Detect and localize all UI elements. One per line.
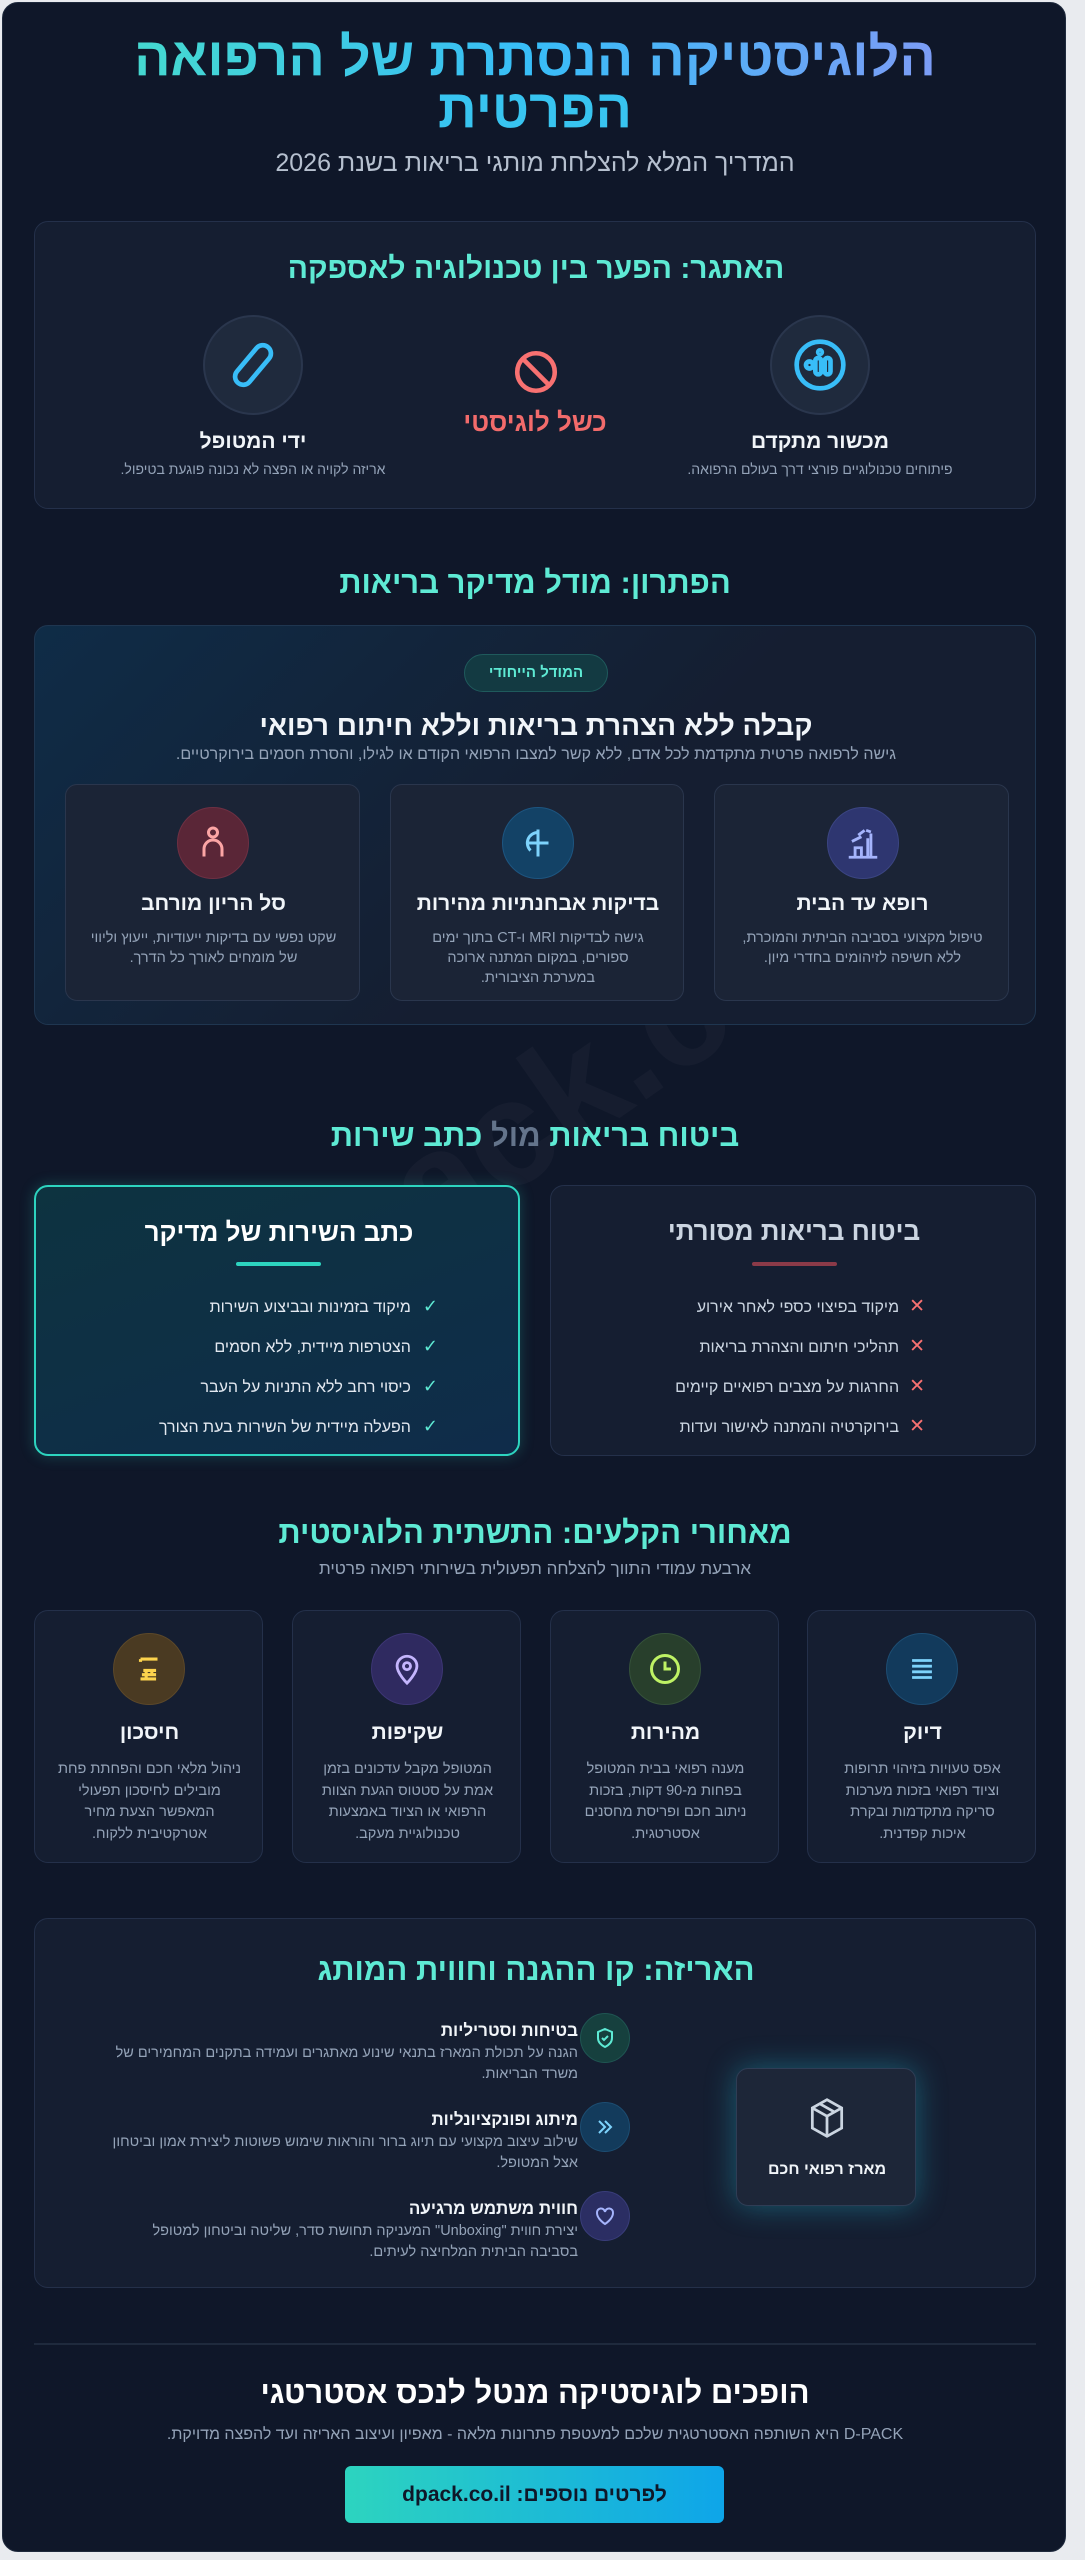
- icon: location pin: [371, 1633, 443, 1705]
- item: patient's hands: [121, 315, 386, 477]
- list: cons: ✕מיקוד בפיצוי כספי לאחר אירוע: [697, 1296, 925, 1317]
- footer text: D-PACK היא השותפה האסטרטגית שלכם למעטפת פתרונות מלאה - מאפיון ועיצוב האריזה ועד להפצה מדויקת.: [167, 2426, 903, 2443]
- card: savings: [34, 1610, 263, 1863]
- panel: packaging: [34, 1918, 1036, 2288]
- panel: challenge: [34, 221, 1036, 509]
- icon: pill: [203, 315, 303, 415]
- card: transparency: המטופל מקבל עדכונים בזמן אמת על סטטוס הגעת הצוות הרפואי או הציוד באמצעות טכנולוגיית מעקב.: [322, 1761, 493, 1842]
- title: הפרטית: [438, 79, 632, 139]
- text: description: גישה לרפואה פרטית מתקדמת לכל אדם, ללא קשר למצבו הרפואי הקודם או לגילו, והסרת חסמים בירוקרטיים.: [176, 746, 896, 763]
- list: cons: [675, 1296, 925, 1437]
- panel: traditional insurance: [550, 1185, 1036, 1456]
- panel: service policy: כתב השירות של מדיקר: [145, 1217, 413, 1247]
- button: contact: [345, 2466, 724, 2523]
- heading: no health declaration: קבלה ללא הצהרת בריאות וללא חיתום רפואי: [259, 710, 813, 741]
- card: accuracy: דיוק: [903, 1721, 942, 1744]
- heading: insurance vs policy: ביטוח בריאות מול כתב שירות: [331, 1118, 739, 1153]
- heading: behind the scenes: מאחורי הקלעים: התשתית הלוגיסטית: [278, 1515, 792, 1550]
- title: הלוגיסטיקה הנסתרת של הרפואה: [134, 27, 936, 87]
- card: extended pregnancy basket: סל הריון מורחב: [141, 892, 286, 915]
- card: transparency: [292, 1610, 521, 1863]
- item: patient's hands: אריזה לקויה או הפצה לא נכונה פוגעת בטיפול.: [121, 461, 385, 477]
- list: pros: ✓מיקוד בזמינות ובביצוע השירות: [210, 1296, 438, 1316]
- card: doctor at home: רופא עד הבית: [797, 892, 928, 915]
- icon: clock: [629, 1633, 701, 1705]
- list: pros: ✓כיסוי רחב ללא התניות על העבר: [200, 1376, 438, 1396]
- panel: solution model: [34, 625, 1036, 1025]
- card: savings: חיסכון: [120, 1721, 179, 1744]
- item: branding: שילוב עיצוב מקצועי עם תיוג ברור והוראות שימוש פשוטות ליצירת אמון וביטחון אצל המטופל.: [113, 2134, 578, 2171]
- item: branding: מיתוג ופונקציונליות: [431, 2110, 578, 2129]
- card: accuracy: [807, 1610, 1036, 1863]
- badge: המודל הייחודי: [489, 664, 583, 681]
- item: user experience: [152, 2191, 630, 2260]
- list: pros: ✓הצטרפות מיידית, ללא חסמים: [214, 1336, 438, 1356]
- subtitle: המדריך המלא להצלחת מותגי בריאות בשנת 2026: [275, 149, 795, 177]
- item: advanced equipment: מכשור מתקדם: [751, 430, 889, 453]
- watermark: dpack.co.il: [205, 798, 936, 1380]
- icon: scan: [502, 807, 574, 879]
- list: pros: ✓הפעלה מיידית של השירות בעת הצורך: [159, 1416, 438, 1436]
- card: fast diagnostics: [390, 784, 684, 1001]
- item: logistic failure: [463, 351, 607, 437]
- icon: box: [810, 2098, 844, 2138]
- card: speed: מהירות: [631, 1721, 700, 1744]
- item: safety: בטיחות וסטריליות: [441, 2021, 578, 2040]
- box: smart medical kit: מארז רפואי חכם: [768, 2161, 886, 2178]
- card: doctor at home: [714, 784, 1009, 1001]
- icon: savings: [113, 1633, 185, 1705]
- icon: shield: [580, 2013, 630, 2063]
- list: cons: ✕בירוקרטיה והמתנה לאישור ועדות: [680, 1416, 925, 1437]
- card: extended pregnancy basket: [65, 784, 360, 1001]
- title: [134, 27, 936, 139]
- item: user experience: חווית משתמש מרגיעה: [409, 2199, 578, 2218]
- icon: heart: [580, 2191, 630, 2241]
- heading: solution: הפתרון: מודל מדיקר בריאות: [339, 565, 731, 600]
- list: cons: ✕תהליכי חיתום והצהרת בריאות: [699, 1336, 925, 1357]
- card: transparency: שקיפות: [372, 1721, 443, 1744]
- card: extended pregnancy basket: שקט נפשי עם בדיקות ייעודיות, ייעוץ וליווי של מומחים לאורך כל הדרך.: [91, 930, 336, 966]
- card: speed: מענה רפואי בבית המטופל בפחות מ-90 דקות, בזכות ניתוב חכם ופריסת מחסנים אסטרטגית.: [585, 1761, 746, 1842]
- heading: packaging: האריזה: קו ההגנה וחווית המותג: [317, 1952, 755, 1987]
- list: pros: [159, 1296, 438, 1436]
- card: fast diagnostics: בדיקות אבחנתיות מהירות: [417, 892, 659, 915]
- card: accuracy: אפס טעויות בזיהוי תרופות וציוד רפואי בזכות מערכות סריקה מתקדמות ובקרת איכות קפדנית.: [844, 1761, 1001, 1842]
- list: cons: ✕החרגות על מצבים רפואיים קיימים: [675, 1376, 925, 1397]
- icon: forbidden: [514, 351, 558, 393]
- icon: list: [886, 1633, 958, 1705]
- item: user experience: יצירת חווית "Unboxing" המעניקה תחושת סדר, שליטה וביטחון למטופל בסביבה הביתית המלחיצה לעיתים.: [152, 2223, 578, 2260]
- item: advanced equipment: [687, 315, 953, 477]
- item: logistic failure: כשל לוגיסטי: [463, 407, 607, 437]
- card: savings: ניהול מלאי חכם והפחתת פחת מובילים לחיסכון תפעולי המאפשר הצעת מחיר אטרקטיבית ללקוח.: [58, 1761, 241, 1842]
- panel: traditional insurance: ביטוח בריאות מסורתי: [668, 1216, 920, 1246]
- card: fast diagnostics: גישה לבדיקות MRI ו-CT בתוך ימים ספורים, במקום המתנה ארוכה במערכת הציבורית.: [432, 930, 644, 986]
- item: advanced equipment: פיתוחים טכנולוגיים פורצי דרך בעולם הרפואה.: [687, 461, 953, 477]
- icon: equipment: [770, 315, 870, 415]
- button: contact: לפרטים נוספים: dpack.co.il: [402, 2483, 667, 2506]
- item: patient's hands: ידי המטופל: [200, 430, 306, 453]
- item: safety: הגנה על תכולת המארז בתנאי שינוע מאתגרים ועמידה בתקנים המחמירים של משרד הבריאות.: [116, 2045, 578, 2082]
- footer heading: הופכים לוגיסטיקה מנטל לנכס אסטרטגי: [260, 2375, 810, 2410]
- item: safety: [116, 2013, 630, 2082]
- icon: person: [177, 807, 249, 879]
- box: smart medical kit: [736, 2068, 916, 2206]
- card: speed: [550, 1610, 779, 1863]
- card: doctor at home: טיפול מקצועי בסביבה הביתית והמוכרת, ללא חשיפה לזיהומים בחדרי מיון.: [742, 930, 983, 966]
- panel: service policy: [34, 1185, 520, 1456]
- item: branding: [113, 2102, 630, 2171]
- badge: [464, 654, 608, 692]
- subtitle: four pillars: ארבעת עמודי התווך להצלחה תפעולית בשירותי רפואה פרטית: [319, 1559, 751, 1578]
- icon: chevrons: [580, 2102, 630, 2152]
- heading: challenge: האתגר: הפער בין טכנולוגיה לאספקה: [288, 252, 784, 285]
- icon: home: [827, 807, 899, 879]
